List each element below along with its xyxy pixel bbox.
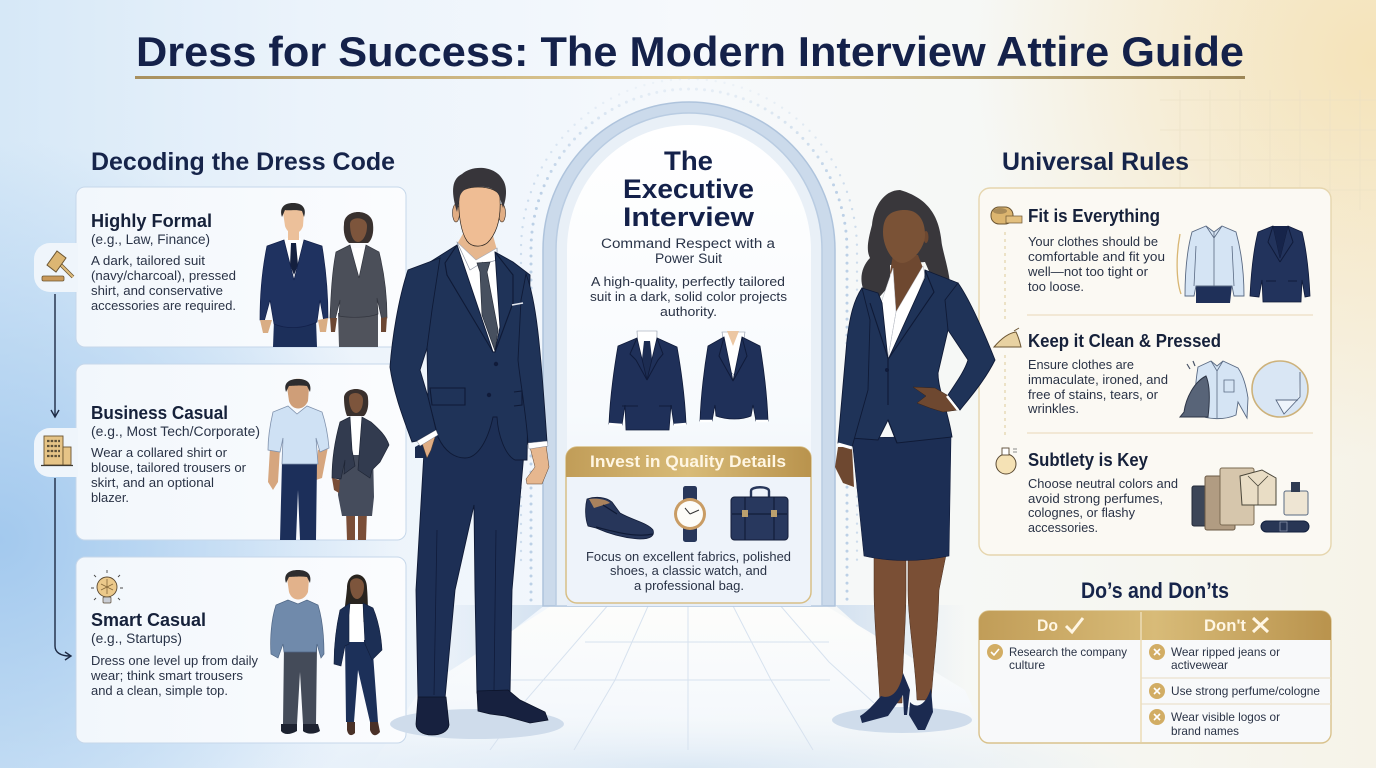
figure: man in shirt and trousers bbox=[268, 379, 329, 540]
arrow: formal to business casual bbox=[51, 294, 59, 417]
icon tab: office building bbox=[34, 428, 78, 477]
rule: fit is everything bbox=[991, 206, 1310, 303]
header: do: Do bbox=[1037, 616, 1058, 635]
text: power suit description bbox=[590, 274, 788, 319]
text: business casual: Business Casual bbox=[91, 403, 228, 423]
heading: do's and don'ts: Do’s and Don’ts bbox=[1081, 578, 1229, 603]
icon tab: gavel bbox=[34, 243, 78, 292]
jacket body bbox=[425, 245, 530, 460]
figure: large woman in navy skirt suit bbox=[832, 190, 995, 733]
skirt bbox=[852, 436, 951, 560]
do item: research: culture bbox=[1009, 658, 1045, 672]
text: power suit description: suit in a dark, solid color projects bbox=[590, 289, 788, 304]
text: smart casual: (e.g., Startups) bbox=[91, 631, 182, 646]
text: smart casual: and a clean, simple top. bbox=[91, 683, 228, 698]
heading: invest in quality details: Invest in Quality Details bbox=[590, 452, 786, 471]
text: smart casual: Dress one level up from daily bbox=[91, 653, 258, 668]
text: subtlety is key: Subtlety is Key bbox=[1028, 450, 1148, 470]
neck and chest bbox=[890, 255, 923, 312]
don't item: ripped jeans bbox=[1149, 644, 1280, 672]
panel: the executive interview arch bbox=[543, 102, 835, 606]
don't item: visible logos: Wear visible logos or bbox=[1171, 710, 1280, 724]
heading: universal rules: Universal Rules bbox=[1002, 148, 1189, 176]
text: fit is everything bbox=[1027, 206, 1165, 294]
icon: wristwatch bbox=[674, 486, 706, 542]
don't item: visible logos: brand names bbox=[1171, 724, 1239, 738]
left hand bbox=[835, 447, 854, 487]
header: don't: Don't bbox=[1204, 616, 1246, 635]
text: business casual: Wear a collared shirt or bbox=[91, 445, 228, 460]
text: highly formal: (e.g., Law, Finance) bbox=[91, 232, 210, 247]
text: keep it clean and pressed: Keep it Clean & Pressed bbox=[1028, 331, 1221, 351]
text: quality details description: Focus on excellent fabrics, polished bbox=[586, 549, 791, 564]
text: quality details description bbox=[586, 549, 791, 593]
hair bbox=[861, 190, 950, 302]
text: subtlety is key: avoid strong perfumes, bbox=[1028, 491, 1163, 506]
neck bbox=[457, 232, 497, 264]
don't item: ripped jeans: activewear bbox=[1171, 658, 1228, 672]
heading: decoding the dress code: Decoding the Dress Code bbox=[91, 148, 395, 176]
text: power suit description: authority. bbox=[660, 304, 717, 319]
heels bbox=[860, 673, 933, 730]
blouse bbox=[881, 266, 925, 358]
icon: women's blazer bbox=[700, 331, 768, 421]
text: fit is everything: comfortable and fit you bbox=[1028, 249, 1165, 264]
icon: shirt with fit arrow bbox=[1177, 226, 1244, 303]
panel: invest in quality details bbox=[566, 447, 811, 603]
text: highly formal: (navy/charcoal), pressed bbox=[91, 268, 236, 283]
text: business casual: blazer. bbox=[91, 490, 129, 505]
text: fit is everything: well—not too tight or bbox=[1027, 264, 1149, 279]
text: highly formal: shirt, and conservative bbox=[91, 283, 223, 298]
text: subtlety is key bbox=[1028, 450, 1178, 535]
text: keep it clean and pressed bbox=[1027, 331, 1221, 416]
figure: woman in blazer and skirt bbox=[332, 389, 389, 540]
text: keep it clean and pressed: immaculate, ironed, and bbox=[1028, 372, 1168, 387]
text: power suit description: A high-quality, perfectly tailored bbox=[591, 274, 785, 289]
icon: men's suit jacket bbox=[609, 331, 686, 430]
text: keep it clean and pressed: free of stains, tears, or bbox=[1028, 387, 1159, 402]
trousers bbox=[416, 410, 524, 698]
icon: briefcase bbox=[731, 487, 788, 540]
icon: perfume bottle bbox=[996, 448, 1017, 474]
left arm bbox=[838, 288, 870, 447]
rule: keep it clean and pressed bbox=[994, 328, 1308, 419]
figure: man in formal suit bbox=[260, 203, 328, 347]
subtitle: power suit bbox=[601, 236, 776, 266]
text: business casual: skirt, and an optional bbox=[91, 475, 214, 490]
text: subtlety is key: colognes, or flashy bbox=[1028, 505, 1135, 520]
heading: the executive interview bbox=[623, 146, 755, 232]
header: do bbox=[1037, 616, 1083, 635]
text: smart casual bbox=[90, 610, 258, 698]
text: fit is everything: Your clothes should be bbox=[1028, 234, 1158, 249]
icon: folded clothes, cologne and belt bbox=[1192, 468, 1309, 532]
dotted halo around the arch bbox=[521, 79, 857, 600]
figure: woman in grey suit bbox=[330, 212, 387, 347]
icon: light bulb bbox=[91, 570, 123, 603]
panel: highly formal bbox=[34, 187, 406, 347]
panel: business casual bbox=[34, 364, 406, 540]
icon: fabric swatch circle bbox=[1252, 361, 1308, 417]
heading: the executive interview: The bbox=[664, 146, 713, 176]
figure: woman in navy suit and trousers bbox=[334, 574, 382, 735]
text: keep it clean and pressed: wrinkles. bbox=[1027, 401, 1079, 416]
don't item: ripped jeans: Wear ripped jeans or bbox=[1171, 645, 1280, 659]
text: smart casual: wear; think smart trousers bbox=[90, 668, 244, 683]
text: smart casual: Smart Casual bbox=[91, 610, 206, 630]
icon: navy blazer bbox=[1250, 226, 1310, 302]
ear and face bbox=[924, 231, 928, 243]
subtitle: power suit: Command Respect with a bbox=[601, 236, 776, 251]
right hand bbox=[526, 445, 549, 484]
text: highly formal: accessories are required. bbox=[91, 298, 236, 313]
arrow: business casual to smart casual bbox=[55, 478, 71, 660]
text: business casual bbox=[91, 403, 260, 505]
ears, face and hair bbox=[452, 204, 460, 222]
subtitle: power suit: Power Suit bbox=[655, 251, 722, 266]
pocket and hand bbox=[415, 443, 428, 458]
do item: research bbox=[987, 644, 1127, 672]
right arm bbox=[518, 274, 547, 444]
panel: universal rules card bbox=[979, 188, 1331, 555]
text: fit is everything: Fit is Everything bbox=[1028, 206, 1160, 226]
text: highly formal bbox=[91, 211, 236, 313]
rule: subtlety is key bbox=[996, 448, 1309, 535]
tie bbox=[477, 262, 498, 351]
shirt and collar bbox=[457, 242, 500, 352]
shoes bbox=[416, 690, 548, 735]
header: don't bbox=[1204, 616, 1268, 635]
icon: dress shoe bbox=[586, 497, 653, 539]
icon: tape measure bbox=[991, 207, 1022, 224]
text: highly formal: Highly Formal bbox=[91, 211, 212, 231]
panel: smart casual bbox=[76, 557, 406, 743]
text: business casual: blouse, tailored trousers or bbox=[91, 460, 247, 475]
text: quality details description: shoes, a classic watch, and bbox=[610, 563, 767, 578]
right arm bbox=[945, 283, 995, 410]
icon: iron on shirt bbox=[1180, 361, 1248, 419]
figure: large man in navy suit bbox=[390, 168, 564, 739]
text: subtlety is key: Choose neutral colors and bbox=[1028, 476, 1178, 491]
left arm bbox=[390, 258, 440, 442]
title: Dress for Success: The Modern Interview Attire Guide bbox=[136, 28, 1244, 75]
text: quality details description: a professional bag. bbox=[634, 578, 744, 593]
text: highly formal: A dark, tailored suit bbox=[91, 253, 205, 268]
legs bbox=[874, 555, 946, 703]
don't item: strong perfume: Use strong perfume/cologne bbox=[1171, 684, 1320, 698]
text: keep it clean and pressed: Ensure clothes are bbox=[1028, 357, 1134, 372]
icon: iron bbox=[994, 328, 1021, 347]
heading: the executive interview: Executive bbox=[623, 174, 754, 204]
lapels and details bbox=[430, 245, 522, 406]
don't item: visible logos bbox=[1149, 709, 1280, 738]
jacket bbox=[848, 270, 958, 443]
panel: do's and don'ts table bbox=[979, 611, 1331, 743]
text: fit is everything: too loose. bbox=[1028, 279, 1084, 294]
text: business casual: (e.g., Most Tech/Corporate) bbox=[91, 424, 260, 439]
heading: the executive interview: Interview bbox=[623, 202, 755, 232]
figure: man in sweater bbox=[271, 570, 324, 734]
floor with perspective tiles bbox=[370, 604, 1000, 768]
do item: research: Research the company bbox=[1009, 645, 1127, 659]
hand on hip bbox=[913, 387, 958, 412]
text: subtlety is key: accessories. bbox=[1028, 520, 1098, 535]
lapels bbox=[870, 270, 934, 443]
